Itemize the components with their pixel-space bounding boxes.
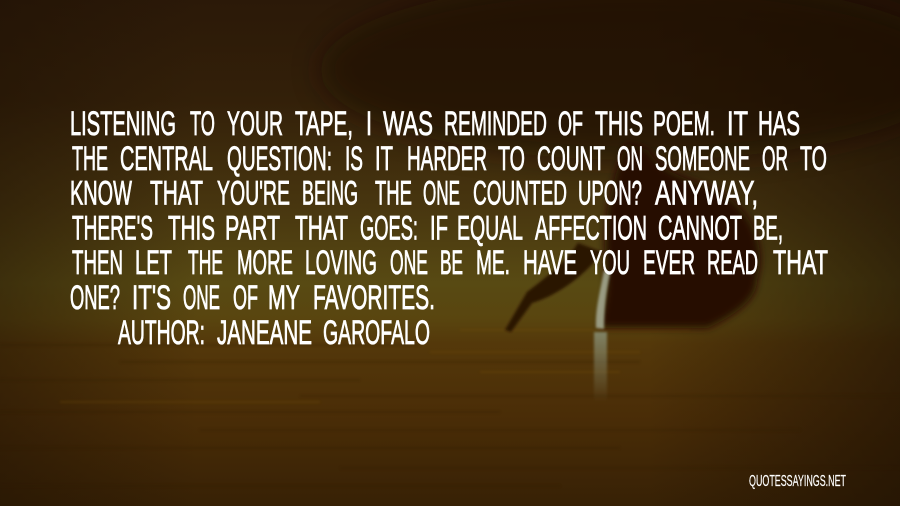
line 5: EVER [643, 244, 695, 282]
line 6: OF [233, 279, 258, 317]
line 1: IT [727, 105, 748, 143]
line 2: QUESTION: [227, 140, 332, 178]
line 3: ANYWAY, [655, 174, 758, 212]
author attribution [118, 314, 430, 352]
line 2: COUNT [537, 140, 605, 178]
line 5: ME. [476, 244, 510, 282]
line 4: THIS [168, 210, 215, 248]
line 5: ONE [390, 244, 428, 282]
line 4: CANNOT [658, 210, 742, 248]
line 3: BEING [302, 174, 358, 212]
line 4: GOES: [360, 210, 418, 248]
line 2: CENTRAL [120, 140, 213, 178]
line 1: HAS [758, 105, 800, 143]
line 1: REMINDED [444, 105, 547, 143]
line 2: ON [617, 140, 643, 178]
line 2: TO [800, 140, 827, 178]
line 4: BE, [753, 210, 783, 248]
author attribution: AUTHOR: [118, 314, 205, 352]
line 5: THEN [72, 244, 123, 282]
line 1: OF [558, 105, 583, 143]
line 4: PART [225, 210, 280, 248]
line 1: TO [190, 105, 215, 143]
line 3: UPON? [578, 174, 642, 212]
line 6: ONE? [70, 279, 120, 317]
line 5: LOVING [305, 244, 377, 282]
line 6 [70, 279, 435, 317]
line 1: YOUR [227, 105, 283, 143]
line 4: EQUAL [457, 210, 523, 248]
line 5: THE [188, 244, 223, 282]
line 6: MY [268, 279, 300, 317]
line 4: THERE'S [72, 210, 153, 248]
quote text [70, 105, 828, 317]
line 1: WAS [383, 105, 433, 143]
line 6: ONE [183, 279, 220, 317]
line 2: IT [375, 140, 393, 178]
line 2: OR [762, 140, 788, 178]
line 4: THAT [295, 210, 348, 248]
line 5: MORE [237, 244, 293, 282]
line 3: THAT [150, 174, 203, 212]
line 1 [70, 105, 800, 143]
line 2 [72, 140, 827, 178]
line 1: THIS [595, 105, 643, 143]
line 5 [72, 244, 828, 282]
line 2: IS [345, 140, 363, 178]
line 1: LISTENING [70, 105, 176, 143]
line 2: TO [498, 140, 525, 178]
line 1: I [366, 105, 372, 143]
line 3: YOU'RE [217, 174, 290, 212]
line 5: LET [135, 244, 172, 282]
line 5: THAT [773, 244, 828, 282]
line 5: HAVE [523, 244, 577, 282]
line 3: COUNTED [473, 174, 567, 212]
line 1: TAPE, [295, 105, 353, 143]
line 3: ONE [423, 174, 460, 212]
line 5: BE [440, 244, 463, 282]
author attribution: JANEANE [217, 314, 312, 352]
line 4: AFFECTION [535, 210, 647, 248]
line 5: YOU [590, 244, 630, 282]
line 2: THE [72, 140, 108, 178]
line 3 [70, 174, 758, 212]
line 1: POEM. [653, 105, 715, 143]
line 3: THE [375, 174, 412, 212]
line 4: IF [430, 210, 448, 248]
line 6: FAVORITES. [313, 279, 435, 317]
line 2: SOMEONE [655, 140, 750, 178]
author attribution: GAROFALO [323, 314, 430, 352]
line 4 [72, 210, 783, 248]
line 5: READ [707, 244, 758, 282]
line 6: IT'S [132, 279, 171, 317]
line 3: KNOW [70, 174, 132, 212]
bird silhouette [505, 143, 760, 402]
line 2: HARDER [407, 140, 487, 178]
